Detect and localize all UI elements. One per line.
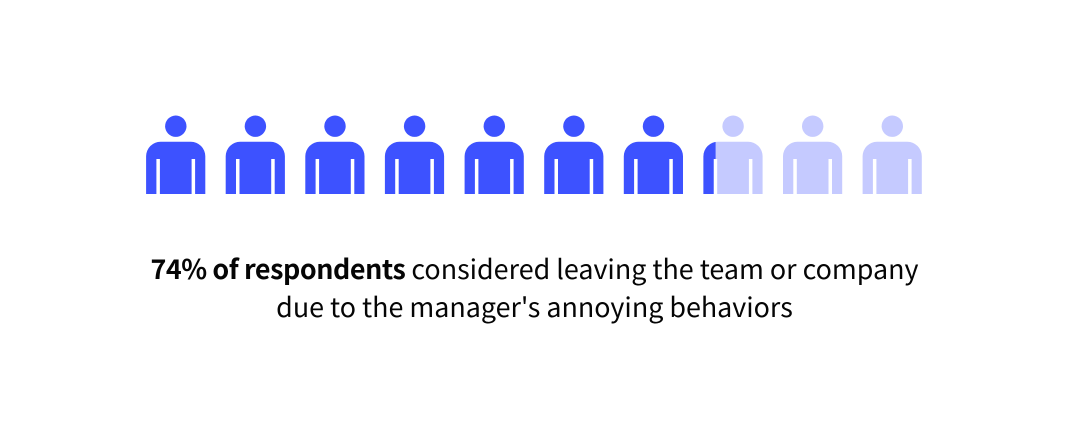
caption text: 74% of respondents considered leaving the team or company [150,248,919,287]
caption text [150,248,919,325]
icon: person 2 filled [226,116,285,194]
pictogram row: 10 people, 74% filled [146,116,922,194]
icon: person 10 light [863,116,922,194]
icon: person 5 filled [465,116,524,194]
icon: person 3 filled [305,116,364,194]
icon: person 6 filled [544,116,603,194]
icon: person 8 partially filled [703,116,763,194]
icon: person 7 filled [624,116,683,194]
icon: person 9 light [783,116,842,194]
icon: person 1 filled [146,116,205,194]
icon: person 4 filled [385,116,444,194]
caption text: due to the manager's annoying behaviors [276,286,793,325]
